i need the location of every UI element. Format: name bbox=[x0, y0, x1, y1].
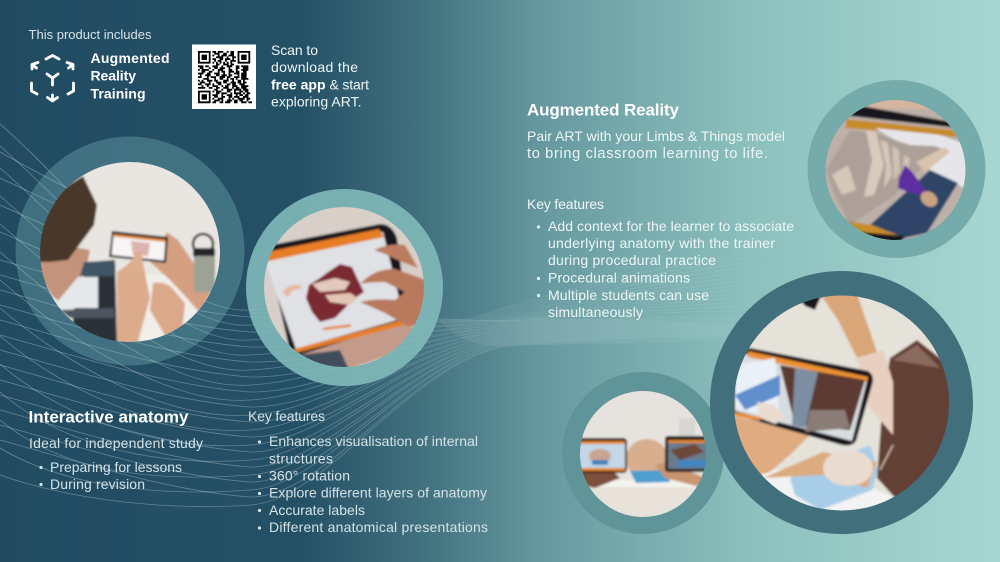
text: scan to download: exploring ART. bbox=[271, 94, 362, 110]
text: Augmented Reality Training: Training bbox=[90, 86, 146, 102]
photo circle: phone overlay on brown trainer bbox=[710, 271, 973, 534]
heading: Interactive anatomy: Interactive anatomy bbox=[28, 408, 189, 426]
text: key features, interactive anatomy: 360° rotation bbox=[269, 468, 350, 484]
photo circle: tablet anatomy model bbox=[246, 189, 443, 386]
text: scan to download: free app bbox=[271, 76, 326, 92]
text: product includes label: This product includes bbox=[28, 27, 152, 42]
text: pair ART intro: to bring classroom learning to life. bbox=[527, 146, 768, 162]
text: pair ART intro bbox=[527, 128, 785, 162]
text: scan to download: Scan to bbox=[271, 42, 318, 58]
text: key features, augmented reality: simultaneously bbox=[548, 304, 643, 320]
text: key features, interactive anatomy: structures bbox=[269, 450, 333, 466]
text: key features, interactive anatomy: Different anatomical presentations bbox=[269, 519, 488, 535]
text: key features, interactive anatomy: Key features bbox=[248, 408, 325, 424]
text: ideal for independent study: Ideal for independent study bbox=[29, 435, 203, 451]
text: key features, augmented reality: Add context for the learner to associate bbox=[548, 218, 794, 234]
text: key features, interactive anatomy: Enhances visualisation of internal bbox=[269, 433, 478, 449]
text: ideal for independent study bbox=[29, 435, 203, 492]
text: key features, augmented reality bbox=[527, 196, 794, 320]
heading: Augmented Reality: Augmented Reality bbox=[527, 100, 680, 120]
text: scan to download: & start bbox=[330, 76, 369, 92]
text: key features, augmented reality: Procedural animations bbox=[548, 270, 690, 286]
text: key features, interactive anatomy: Explore different layers of anatomy bbox=[269, 484, 487, 500]
text: scan to download bbox=[271, 42, 369, 110]
photo circle: student using phone bbox=[16, 136, 244, 366]
text: key features, augmented reality: Key features bbox=[527, 196, 604, 212]
text: ideal for independent study: During revision bbox=[50, 476, 145, 492]
photo circle: phone showing simulator on table bbox=[562, 372, 724, 534]
text: Augmented Reality Training bbox=[90, 50, 170, 102]
icon: augmented reality cube bbox=[32, 56, 74, 101]
text: key features, interactive anatomy bbox=[248, 408, 488, 535]
text: pair ART intro: Pair ART with your Limbs & Things model bbox=[527, 128, 785, 144]
QR code bbox=[192, 44, 256, 109]
text: key features, augmented reality: underlying anatomy with the trainer bbox=[548, 235, 775, 251]
text: ideal for independent study: Preparing for lessons bbox=[50, 459, 182, 475]
photo circle: trainer seen through tablet bbox=[808, 80, 986, 258]
text: scan to download: download the bbox=[271, 59, 358, 75]
text: key features, augmented reality: during procedural practice bbox=[548, 252, 716, 268]
decorative wave line mesh bbox=[0, 124, 810, 507]
text: key features, augmented reality: Multiple students can use bbox=[548, 287, 709, 303]
text: key features, interactive anatomy: Accurate labels bbox=[269, 502, 365, 518]
text: Augmented Reality Training: Reality bbox=[90, 68, 136, 84]
text: Augmented Reality Training: Augmented bbox=[90, 50, 170, 66]
